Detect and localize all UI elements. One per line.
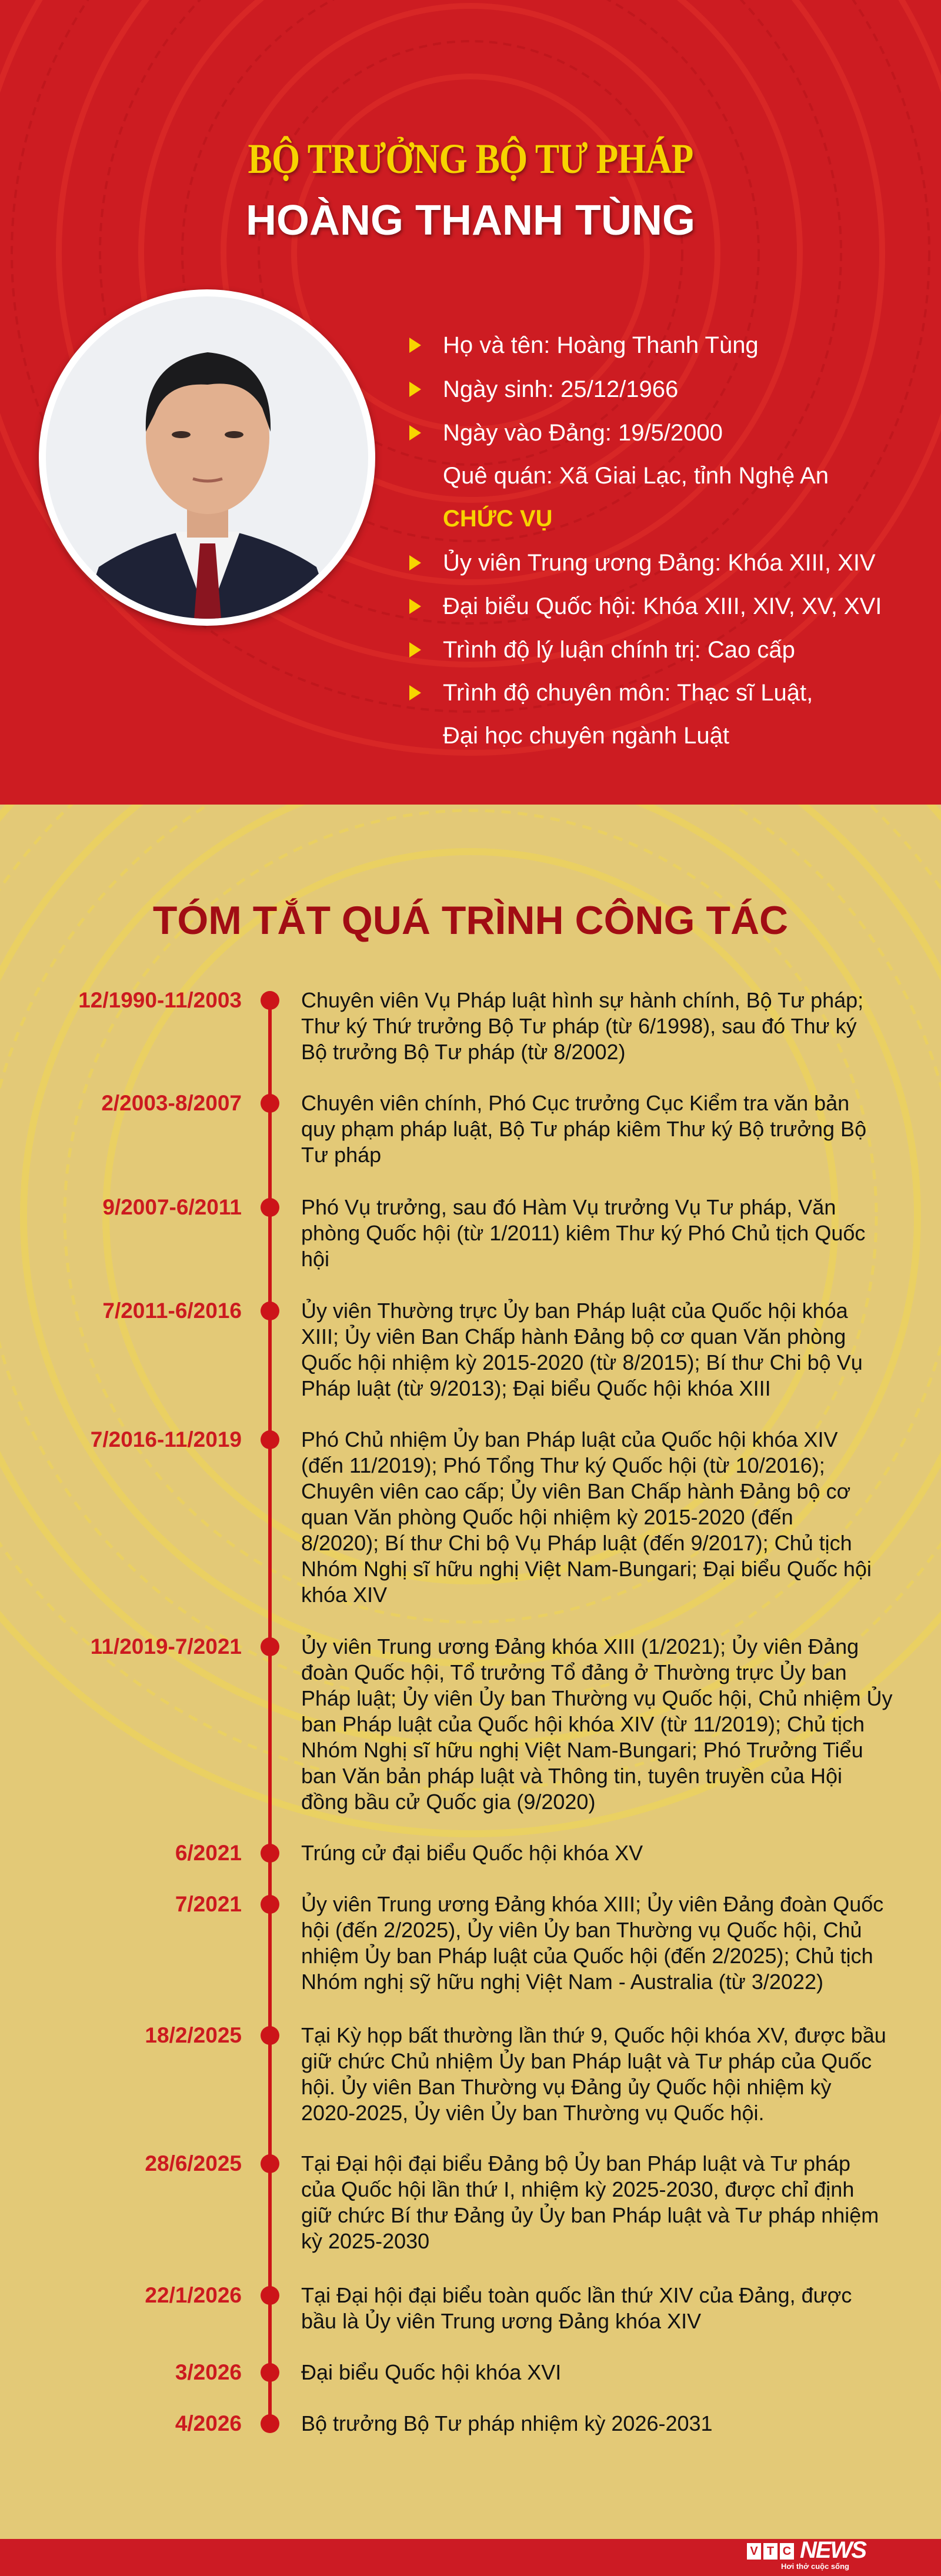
entry 10: Tại Đại hội đại biểu Đảng bộ Ủy ban Pháp luật và Tư pháp: [301, 2151, 850, 2175]
entry 3: Phó Vụ trưởng, sau đó Hàm Vụ trưởng Vụ Tư pháp, Văn: [301, 1195, 836, 1219]
entry 9: giữ chức Chủ nhiệm Ủy ban Pháp luật và Tư pháp của Quốc: [301, 2049, 872, 2073]
entry 6: đoàn Quốc hội, Tổ trưởng Tổ đảng ở Thường trực Ủy ban: [301, 1660, 847, 1684]
entry 6: 11/2019-7/2021: [91, 1634, 242, 1659]
entry 1: Thư ký Thứ trưởng Bộ Tư pháp (từ 6/1998), sau đó Thư ký: [301, 1014, 857, 1038]
entry 6: ban Văn bản pháp luật và Thông tin, tuyên truyền của Hội: [301, 1764, 842, 1788]
entry 7: Trúng cử đại biểu Quốc hội khóa XV: [301, 1841, 643, 1865]
entry 13: Bộ trưởng Bộ Tư pháp nhiệm kỳ 2026-2031: [301, 2411, 713, 2435]
entry 9: 2020-2025, Ủy viên Ủy ban Thường vụ Quốc hội.: [301, 2101, 765, 2125]
entry 8: hội (đến 2/2025), Ủy viên Ủy ban Thường vụ Quốc hội, Chủ: [301, 1918, 862, 1942]
entry 5: quan Văn phòng Quốc hội nhiệm kỳ 2015-2020 (đến: [301, 1505, 793, 1529]
entry 8: nhiệm Ủy ban Pháp luật của Quốc hội (đến 2/2025); Chủ tịch: [301, 1944, 873, 1968]
entry 8: Ủy viên Trung ương Đảng khóa XIII; Ủy viên Đảng đoàn Quốc: [301, 1892, 883, 1916]
info: central committee: Ủy viên Trung ương Đảng: Khóa XIII, XIV: [443, 550, 876, 576]
entry 2: Chuyên viên chính, Phó Cục trưởng Cục Kiểm tra văn bản: [301, 1091, 849, 1115]
heading: chuc vu: CHỨC VỤ: [443, 506, 553, 532]
info: political: Trình độ lý luận chính trị: Cao cấp: [443, 637, 795, 663]
title: BỘ TRƯỞNG BỘ TƯ PHÁP: [248, 135, 693, 182]
timeline entries: [78, 988, 893, 2435]
entry 6: Ủy viên Trung ương Đảng khóa XIII (1/2021); Ủy viên Đảng: [301, 1634, 859, 1659]
entry 10: kỳ 2025-2030: [301, 2229, 429, 2253]
entry 10: [145, 2151, 879, 2253]
entry 2: 2/2003-8/2007: [101, 1091, 242, 1115]
entry 10: 28/6/2025: [145, 2151, 242, 2175]
entry 4: Pháp luật (từ 9/2013); Đại biểu Quốc hội khóa XIII: [301, 1376, 771, 1400]
entry 7: 6/2021: [175, 1841, 242, 1865]
entry 12: 3/2026: [175, 2360, 242, 2384]
title: HOÀNG THANH TÙNG: [246, 197, 695, 244]
info: deputy: Đại biểu Quốc hội: Khóa XIII, XIV, XV, XVI: [443, 593, 882, 619]
entry 8: 7/2021: [175, 1892, 242, 1916]
entry 4: Quốc hội nhiệm kỳ 2015-2020 (từ 8/2015); Bí thư Chi bộ Vụ: [301, 1350, 863, 1374]
entry 5: Chuyên viên cao cấp; Ủy viên Ban Chấp hành Đảng bộ cơ: [301, 1479, 850, 1503]
logo: VTC News: Hơi thở cuộc sống: [781, 2562, 849, 2571]
entry 1: Chuyên viên Vụ Pháp luật hình sự hành chính, Bộ Tư pháp;: [301, 988, 863, 1012]
entry 1: 12/1990-11/2003: [78, 988, 242, 1012]
info: party: Ngày vào Đảng: 19/5/2000: [443, 420, 723, 446]
entry 12: Đại biểu Quốc hội khóa XVI: [301, 2360, 561, 2384]
personal info list: [409, 332, 882, 749]
entry 5: Phó Chủ nhiệm Ủy ban Pháp luật của Quốc hội khóa XIV: [301, 1427, 838, 1451]
entry 1: Bộ trưởng Bộ Tư pháp (từ 8/2002): [301, 1040, 626, 1064]
entry 5: khóa XIV: [301, 1583, 387, 1607]
entry 13: 4/2026: [175, 2411, 242, 2435]
logo: VTC News: V: [750, 2545, 758, 2558]
entry 8: [175, 1892, 883, 1994]
entry 5: [91, 1427, 872, 1607]
entry 3: hội: [301, 1247, 329, 1271]
entry 9: 18/2/2025: [145, 2023, 242, 2047]
entry 10: của Quốc hội lần thứ I, nhiệm kỳ 2025-2030, được chỉ định: [301, 2177, 854, 2201]
title: [246, 135, 696, 244]
beige background pattern: [0, 805, 941, 1837]
entry 12: [175, 2360, 561, 2384]
entry 11: 22/1/2026: [145, 2283, 242, 2307]
info: hometown: Quê quán: Xã Giai Lạc, tỉnh Nghệ An: [443, 463, 829, 489]
entry 5: Nhóm Nghị sĩ hữu nghị Việt Nam-Bungari; Đại biểu Quốc hội: [301, 1557, 872, 1581]
logo: VTC News: NEWS: [800, 2537, 866, 2563]
entry 3: [102, 1195, 865, 1271]
info: expertise: Trình độ chuyên môn: Thạc sĩ Luật,: [443, 680, 813, 706]
entry 9: [145, 2023, 886, 2125]
entry 11: [145, 2283, 852, 2333]
entry 10: giữ chức Bí thư Đảng ủy Ủy ban Pháp luật và Tư pháp nhiệm: [301, 2203, 879, 2227]
entry 1: [78, 988, 863, 1064]
entry 11: bầu là Ủy viên Trung ương Đảng khóa XIV: [301, 2309, 701, 2333]
entry 4: [102, 1299, 863, 1400]
entry 11: Tại Đại hội đại biểu toàn quốc lần thứ XIV của Đảng, được: [301, 2283, 852, 2307]
logo: VTC News: C: [783, 2545, 791, 2558]
entry 2: Tư pháp: [301, 1143, 381, 1167]
entry 4: Ủy viên Thường trực Ủy ban Pháp luật của Quốc hội khóa: [301, 1299, 848, 1323]
logo: VTC News: T: [767, 2545, 774, 2558]
entry 3: 9/2007-6/2011: [102, 1195, 242, 1219]
info: name: Họ và tên: Hoàng Thanh Tùng: [443, 332, 759, 358]
entry 8: Nhóm nghị sỹ hữu nghị Việt Nam - Australia (từ 3/2022): [301, 1970, 823, 1994]
entry 2: [101, 1091, 866, 1167]
entry 6: đồng bầu cử Quốc gia (9/2020): [301, 1790, 595, 1814]
timeline vertical line: [268, 1000, 272, 2424]
info: expertise line 2: Đại học chuyên ngành Luật: [443, 723, 729, 749]
portrait photo: [39, 289, 375, 626]
entry 4: 7/2011-6/2016: [102, 1299, 242, 1323]
entry 5: 7/2016-11/2019: [91, 1427, 242, 1451]
section heading: TÓM TẮT QUÁ TRÌNH CÔNG TÁC: [153, 898, 788, 943]
footer bar: [0, 2539, 941, 2576]
info: birth: Ngày sinh: 25/12/1966: [443, 376, 678, 402]
entry 6: ban Pháp luật của Quốc hội khóa XIV (từ 11/2019); Chủ tịch: [301, 1712, 865, 1736]
entry 6: [91, 1634, 893, 1814]
logo: VTC News: [747, 2537, 867, 2571]
entry 9: Tại Kỳ họp bất thường lần thứ 9, Quốc hội khóa XV, được bầu: [301, 2023, 886, 2047]
entry 5: (đến 11/2019); Phó Tổng Thư ký Quốc hội (từ 10/2016);: [301, 1453, 825, 1477]
entry 6: Nhóm Nghị sĩ hữu nghị Việt Nam-Bungari; Phó Trưởng Tiểu: [301, 1738, 863, 1762]
entry 5: 8/2020); Bí thư Chi bộ Vụ Pháp luật (đến 9/2017); Chủ tịch: [301, 1531, 852, 1555]
red header background: [0, 0, 941, 805]
entry 9: hội. Ủy viên Ban Thường vụ Đảng ủy Quốc hội nhiệm kỳ: [301, 2075, 832, 2099]
entry 6: Pháp luật; Ủy viên Ủy ban Thường vụ Quốc hội, Chủ nhiệm Ủy: [301, 1686, 893, 1710]
entry 3: phòng Quốc hội (từ 1/2011) kiêm Thư ký Phó Chủ tịch Quốc: [301, 1221, 865, 1245]
entry 4: XIII; Ủy viên Ban Chấp hành Đảng bộ cơ quan Văn phòng: [301, 1324, 846, 1349]
entry 2: quy phạm pháp luật, Bộ Tư pháp kiêm Thư ký Bộ trưởng Bộ: [301, 1117, 866, 1141]
